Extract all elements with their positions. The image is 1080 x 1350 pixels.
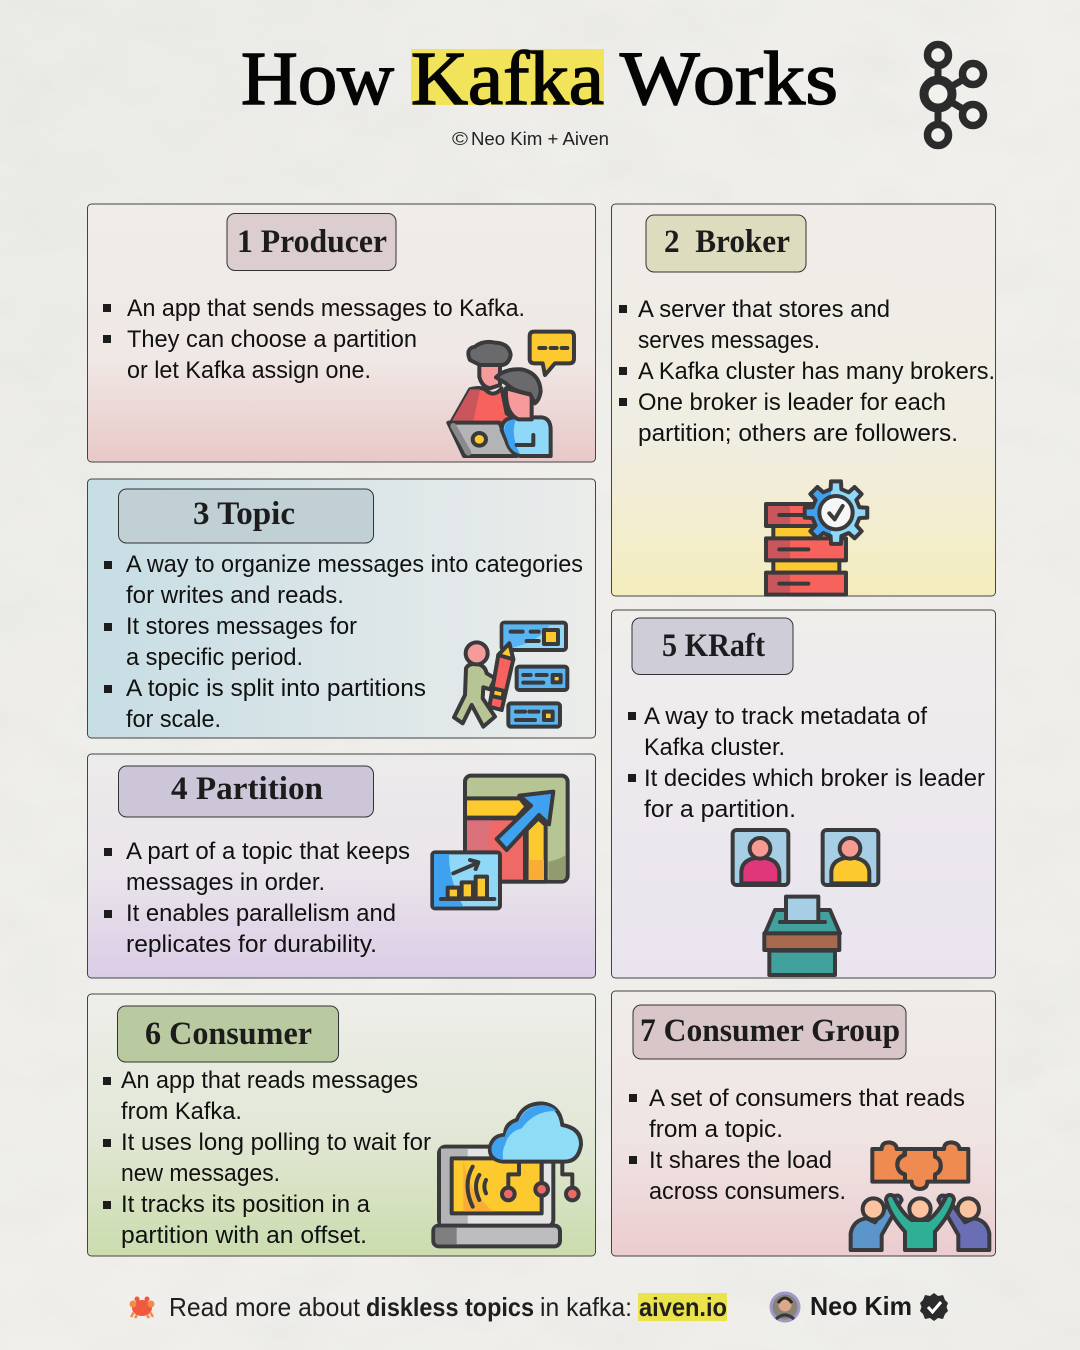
icon: kafka logo xyxy=(924,44,984,146)
text: partition bullets: messages in order. xyxy=(126,869,325,896)
text: broker bullets: One broker is leader for each xyxy=(638,389,946,416)
icon: puzzle and team xyxy=(851,1142,989,1250)
heading: 5 KRaft xyxy=(632,618,793,674)
footer text xyxy=(169,1292,727,1322)
icon: broker stack and gear xyxy=(766,481,867,595)
text: consumer group bullets: A set of consumers that reads xyxy=(649,1085,965,1112)
subtitle: Neo Kim + Aiven xyxy=(471,129,609,149)
footer xyxy=(130,1291,948,1322)
panel: 2 Broker xyxy=(612,204,996,596)
heading: 5 KRaft: 5 KRaft xyxy=(662,628,765,664)
heading: 4 Partition xyxy=(118,766,374,817)
text: producer bullets: or let Kafka assign one. xyxy=(127,357,371,384)
text: kraft bullets: Kafka cluster. xyxy=(644,734,785,761)
text: producer bullets xyxy=(103,295,525,384)
panel: 4 Partition xyxy=(88,754,596,978)
heading: 7 Consumer Group: 7 Consumer Group xyxy=(640,1013,900,1049)
heading: 2 Broker: 2 Broker xyxy=(664,224,790,260)
footer text: Read more about xyxy=(169,1292,361,1322)
title: Works xyxy=(620,37,838,121)
text: consumer group bullets: from a topic. xyxy=(649,1116,783,1143)
text: producer bullets: They can choose a partition xyxy=(127,326,417,353)
title: Kafka xyxy=(411,37,604,121)
heading: 1 Producer xyxy=(227,214,396,270)
text: producer bullets: An app that sends messages to Kafka. xyxy=(127,295,525,322)
heading: 2 Broker xyxy=(646,215,806,272)
text: consumer bullets: partition with an offset. xyxy=(121,1222,367,1249)
panel: 3 Topic xyxy=(88,479,596,738)
icon: person writing topics xyxy=(454,623,567,727)
heading: 3 Topic: 3 Topic xyxy=(193,496,295,532)
text: topic bullets: for writes and reads. xyxy=(126,582,344,609)
text: consumer bullets: new messages. xyxy=(121,1160,280,1187)
text: partition bullets xyxy=(104,838,410,958)
title highlight xyxy=(411,49,604,105)
icon: producers at laptop xyxy=(448,332,574,456)
icon: verified badge xyxy=(920,1293,948,1321)
text: partition bullets: A part of a topic that keeps xyxy=(126,838,410,865)
text: kraft bullets: for a partition. xyxy=(644,796,796,823)
text: broker bullets: A server that stores and xyxy=(638,296,890,323)
text: consumer bullets: from Kafka. xyxy=(121,1098,242,1125)
icon: avatar xyxy=(770,1292,800,1322)
footer text: aiven.io xyxy=(639,1292,727,1322)
panel: 1 Producer xyxy=(88,204,596,462)
text: partition bullets: replicates for durability. xyxy=(126,931,377,958)
text: consumer bullets: It tracks its position in a xyxy=(121,1191,371,1218)
heading: 6 Consumer xyxy=(118,1006,338,1062)
panel: 5 KRaft xyxy=(612,610,996,978)
heading: 7 Consumer Group xyxy=(633,1005,906,1059)
text: consumer group bullets: It shares the load xyxy=(649,1147,832,1174)
text: topic bullets xyxy=(104,551,583,733)
heading: 6 Consumer: 6 Consumer xyxy=(145,1016,312,1052)
text: consumer group bullets: across consumers. xyxy=(649,1178,846,1205)
icon: laptop and cloud xyxy=(433,1103,581,1246)
footer text: in kafka: xyxy=(540,1292,632,1322)
heading: 1 Producer: 1 Producer xyxy=(237,224,387,260)
icon: ballot box and candidates xyxy=(733,830,878,975)
text: kraft bullets xyxy=(628,703,985,823)
text: topic bullets: It stores messages for xyxy=(126,613,357,640)
text: consumer group bullets xyxy=(629,1085,965,1205)
text: broker bullets: partition; others are followers. xyxy=(638,420,958,447)
text: kraft bullets: A way to track metadata of xyxy=(644,703,927,730)
text: topic bullets: A way to organize messages into categories xyxy=(126,551,583,578)
text: partition bullets: It enables parallelism and xyxy=(126,900,396,927)
text: consumer bullets: It uses long polling to wait for xyxy=(121,1129,431,1156)
title xyxy=(241,37,838,121)
heading: 4 Partition: 4 Partition xyxy=(171,771,323,807)
panel: 7 Consumer Group xyxy=(612,991,996,1256)
heading: 3 Topic xyxy=(118,489,374,543)
text: topic bullets: A topic is split into partitions xyxy=(126,675,426,702)
author name: Neo Kim xyxy=(810,1291,912,1321)
text: consumer bullets xyxy=(103,1067,431,1249)
text: broker bullets: serves messages. xyxy=(638,327,820,354)
icon: partition chart xyxy=(432,776,568,908)
text: topic bullets: a specific period. xyxy=(126,644,303,671)
subtitle: © xyxy=(452,129,468,149)
text: broker bullets: A Kafka cluster has many brokers. xyxy=(638,358,995,385)
text: topic bullets: for scale. xyxy=(126,706,221,733)
panel: 6 Consumer xyxy=(88,994,596,1256)
text: kraft bullets: It decides which broker is leader xyxy=(644,765,985,792)
title: How xyxy=(241,37,394,121)
text: broker bullets xyxy=(619,296,995,447)
text: consumer bullets: An app that reads messages xyxy=(121,1067,418,1094)
icon: crab xyxy=(130,1296,154,1318)
footer text: diskless topics xyxy=(366,1292,534,1322)
